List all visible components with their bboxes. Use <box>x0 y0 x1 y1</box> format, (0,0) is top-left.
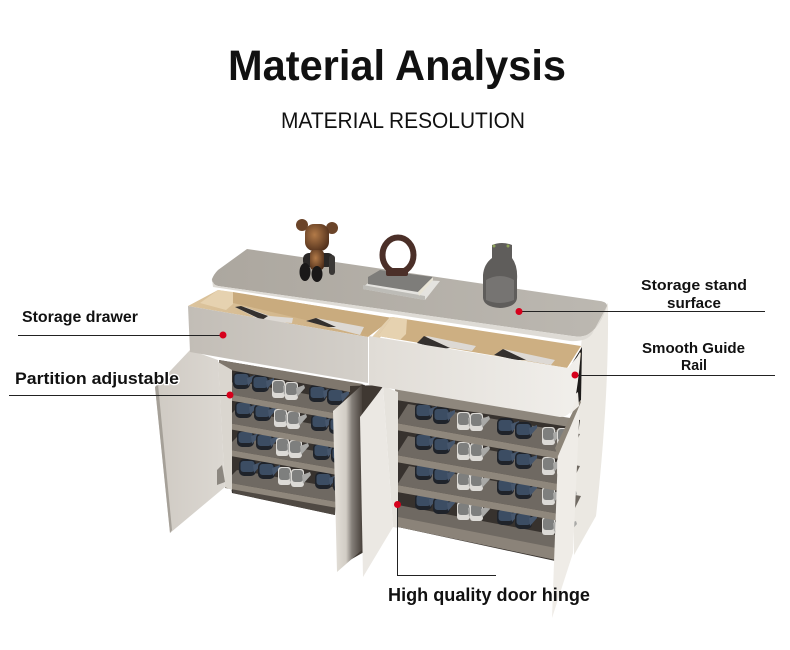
storage surface top <box>212 249 607 341</box>
title: Material Analysis <box>228 42 566 90</box>
callout: storage stand surface <box>516 277 765 315</box>
callout: smooth guide rail: Smooth Guide <box>642 340 745 357</box>
callout: partition adjustable: Partition adjustable <box>15 369 179 388</box>
callout: storage stand surface: Storage stand <box>641 277 747 294</box>
right door, inner <box>360 386 398 577</box>
callout: high quality door hinge <box>388 501 590 605</box>
decor: ring and books <box>363 238 440 300</box>
callout: high quality door hinge: High quality door hinge <box>388 585 590 605</box>
callout: storage stand surface: surface <box>667 295 721 312</box>
callout: partition adjustable <box>9 369 234 398</box>
guide rail <box>566 347 582 415</box>
decor: glass vase <box>483 243 517 308</box>
left compartment <box>218 360 365 515</box>
cabinet right side panel <box>574 303 608 555</box>
shoe cabinet <box>155 249 608 618</box>
right drawer front <box>369 336 580 417</box>
callout: smooth guide rail <box>572 340 775 378</box>
right door, outer <box>552 399 581 618</box>
left drawer interior <box>188 290 396 339</box>
right compartment <box>395 389 581 562</box>
subtitle: MATERIAL RESOLUTION <box>281 108 525 133</box>
left door, outer <box>155 350 225 533</box>
left door, inner <box>333 385 384 572</box>
right drawer interior <box>378 317 581 368</box>
callout: smooth guide rail: Rail <box>681 357 707 374</box>
callout: storage drawer: Storage drawer <box>22 309 138 326</box>
callout: storage drawer <box>18 309 226 338</box>
decor: bear figurine <box>296 219 338 282</box>
left drawer front <box>188 306 368 383</box>
